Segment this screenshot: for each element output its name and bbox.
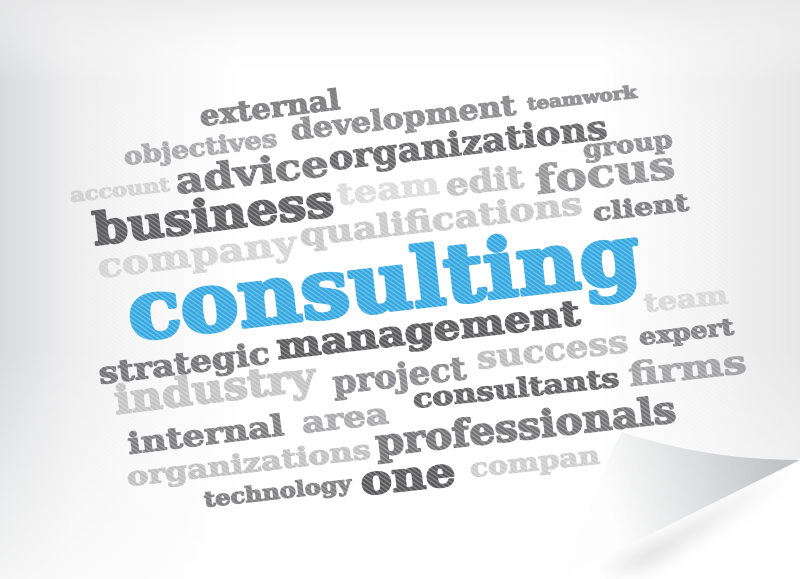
supporting words below: internal (126, 408, 286, 461)
supporting words above: teamwork (526, 82, 639, 115)
supporting words above: group (581, 124, 674, 164)
supporting words above: client (591, 187, 690, 227)
supporting words above: organizations (326, 108, 609, 178)
supporting words above: qualifications (298, 186, 584, 254)
supporting words above: team (335, 166, 442, 213)
headline word: consulting: consulting (122, 206, 645, 360)
supporting words below: compan (469, 441, 601, 483)
supporting words below: technology (203, 470, 354, 512)
supporting words below (97, 280, 748, 512)
supporting words above: external (198, 83, 342, 133)
supporting words below: expert (638, 313, 735, 351)
supporting words below: organizations (125, 435, 372, 493)
supporting words below: one (358, 448, 458, 505)
supporting words below: management (274, 293, 582, 368)
supporting words below: industry (112, 353, 319, 424)
supporting words below: firms (627, 343, 748, 394)
supporting words above: development (289, 89, 517, 147)
supporting words above: focus (533, 142, 677, 204)
supporting words above (69, 82, 690, 286)
supporting words above: objectives (122, 123, 279, 171)
supporting words above: advice (173, 142, 331, 203)
supporting words below: team (643, 280, 729, 318)
supporting words above: business (90, 176, 337, 256)
supporting words below: consultants (412, 363, 621, 415)
supporting words below: professionals (373, 387, 678, 465)
supporting words above: company (95, 223, 299, 286)
supporting words above: account (69, 174, 171, 207)
supporting words below: area (300, 396, 390, 440)
supporting words below: project (331, 349, 468, 402)
peeled corner of paper (555, 432, 800, 579)
supporting words below: strategic (97, 336, 272, 392)
supporting words above: edit (444, 159, 526, 204)
supporting words below: success (475, 324, 630, 377)
